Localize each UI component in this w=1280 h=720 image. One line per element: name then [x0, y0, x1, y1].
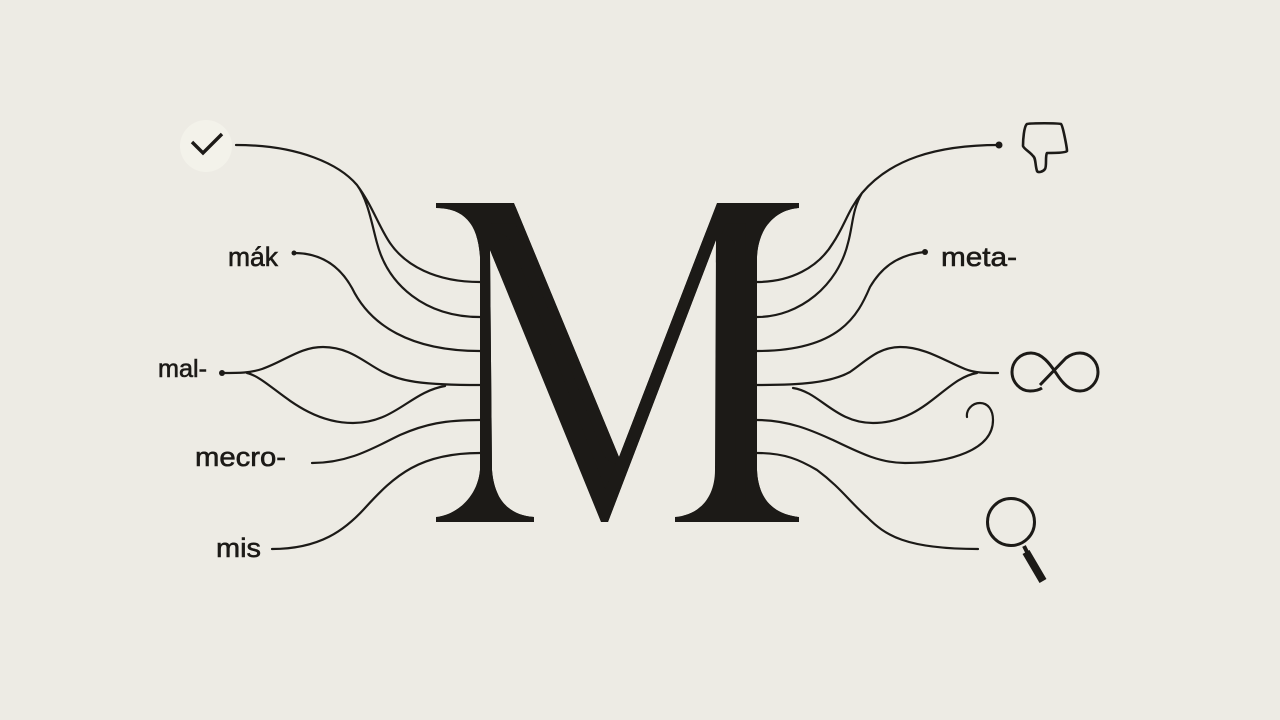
icon: check mark	[180, 120, 232, 172]
line: mal- to M	[222, 347, 480, 423]
label: mecro-: mecro-	[195, 442, 286, 472]
right connector lines	[757, 145, 999, 549]
label: mák: mák	[228, 242, 278, 272]
icon: magnifying glass	[988, 498, 1043, 581]
line: M to meta-	[757, 252, 925, 351]
label: mis: mis	[216, 533, 261, 563]
line: M to magnifier	[757, 453, 978, 549]
central letter M: M	[428, 92, 809, 627]
label: meta-: meta-	[941, 242, 1017, 272]
line: check to M	[236, 145, 480, 317]
icon: infinity	[1012, 353, 1098, 391]
label: mal-: mal-	[158, 355, 207, 383]
line: mák to M	[294, 253, 480, 351]
line: mecro- to M	[312, 420, 480, 463]
icon: thumbs down	[996, 123, 1067, 172]
line: mis to M	[272, 453, 480, 549]
line: M to infinity	[757, 347, 998, 423]
left connector lines	[222, 145, 480, 549]
line: M to thumbs down	[757, 145, 999, 317]
line: M to curl	[757, 403, 993, 463]
